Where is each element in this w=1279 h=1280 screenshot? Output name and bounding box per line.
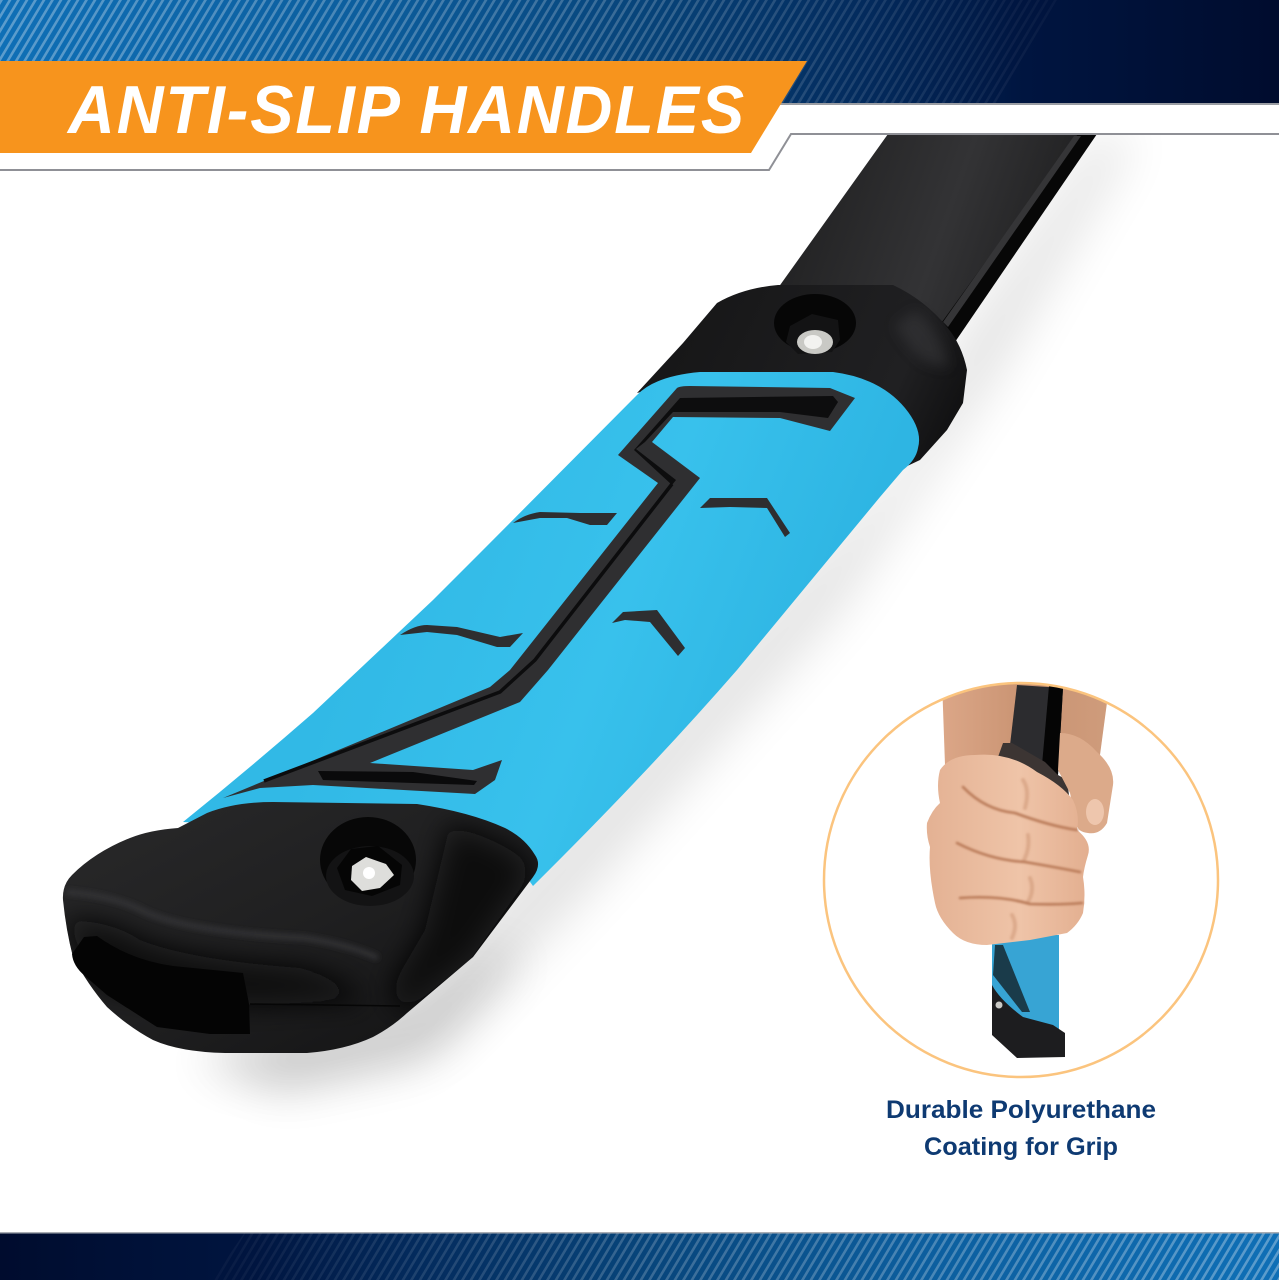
lower grip [992, 935, 1065, 1058]
handle in hand [998, 685, 1069, 795]
fingers [927, 755, 1089, 945]
open slot [72, 936, 250, 1034]
caption [886, 1096, 1156, 1161]
product: handle bar with grip [63, 134, 1097, 1053]
forearm [942, 680, 1110, 765]
circle outline [824, 683, 1218, 1077]
top end cap [637, 285, 967, 468]
bottom screw [320, 817, 416, 906]
caption: Coating for Grip [924, 1133, 1118, 1161]
product shadow [190, 136, 1135, 1090]
knuckle shading [957, 780, 1082, 938]
header bar [0, 0, 1279, 105]
bottom end cap [63, 802, 538, 1053]
main groove [223, 386, 855, 798]
inset circle: hand gripping handle [824, 680, 1218, 1077]
tread grooves [400, 498, 790, 656]
metal bar [778, 134, 1097, 342]
caption: Durable Polyurethane [886, 1096, 1156, 1124]
footer bar [0, 1232, 1279, 1280]
top screw [774, 294, 856, 354]
title banner [0, 61, 807, 153]
blue polyurethane grip [183, 372, 919, 886]
white band with grey rule [0, 105, 1279, 171]
title: ANTI-SLIP HANDLES [66, 72, 746, 148]
thumb [1058, 733, 1113, 833]
